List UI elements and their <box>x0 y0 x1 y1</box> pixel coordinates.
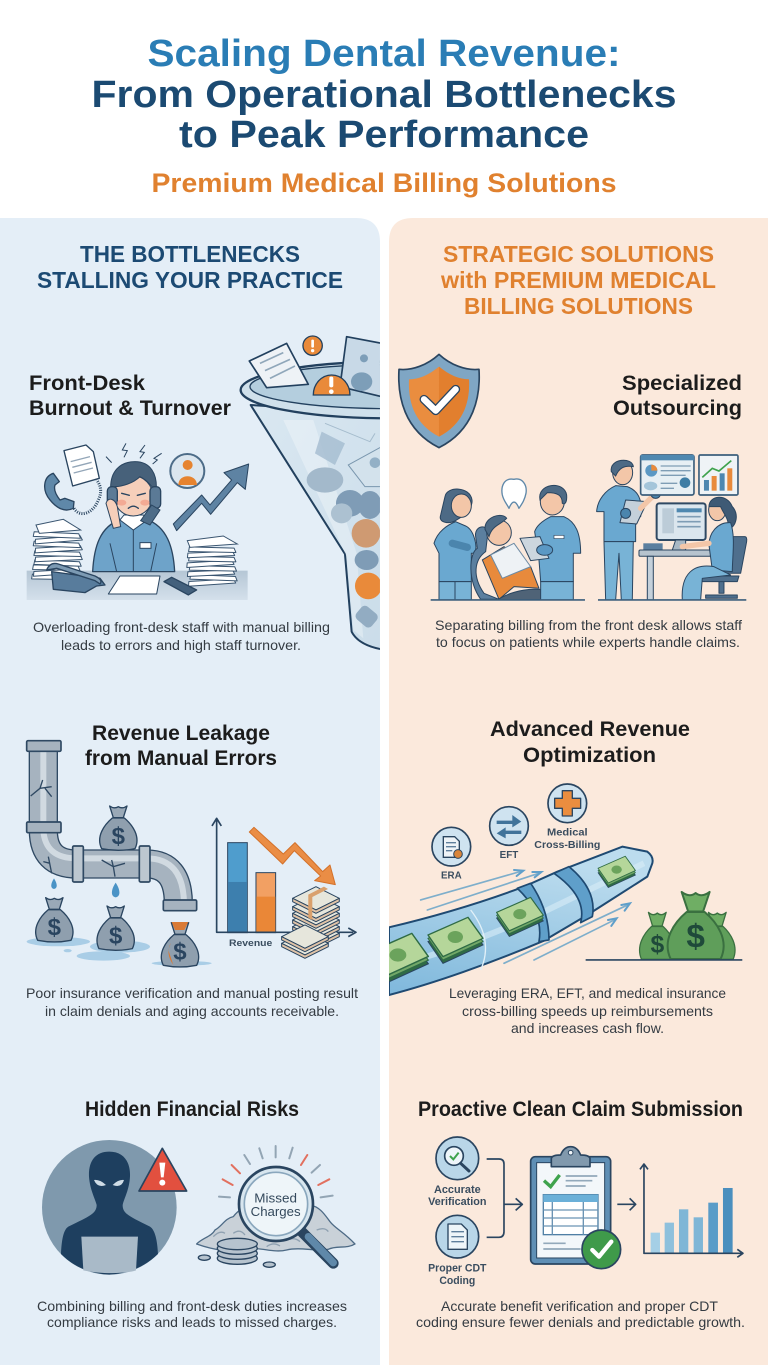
section title: revenue leakage: Revenue Leakage <box>92 721 270 745</box>
caption: outsourcing: Separating billing from the front desk allows staff <box>435 617 742 633</box>
illustration: outsourcing <box>399 354 747 600</box>
section title: specialized outsourcing <box>613 371 742 420</box>
section title: revenue leakage: from Manual Errors <box>85 746 277 770</box>
icon: cash pipeline <box>368 847 653 995</box>
illustration: clean claims flow <box>428 1137 743 1287</box>
subtitle: Premium Medical Billing Solutions <box>152 168 616 198</box>
icon: medical cross-billing: Cross-Billing <box>534 840 600 851</box>
caption: hidden risks: compliance risks and leads to missed charges. <box>47 1314 337 1330</box>
icon: EFT: EFT <box>500 850 519 861</box>
title: From Operational Bottlenecks <box>92 74 676 116</box>
illustration: funnel <box>240 335 380 650</box>
section title: front-desk burnout <box>29 371 232 420</box>
speed arrows <box>421 870 630 963</box>
section title: revenue optimization: Optimization <box>523 743 656 767</box>
icon: worried woman <box>93 443 175 572</box>
icon: green money bags: $ <box>686 918 705 955</box>
caption: revenue optimization <box>449 985 726 1036</box>
section title: revenue optimization: Advanced Revenue <box>490 717 690 741</box>
caption: revenue optimization: and increases cash flow. <box>511 1020 664 1036</box>
icon: pile with magnifying glass: Missed <box>254 1191 297 1205</box>
section title: clean claim submission: Proactive Clean Claim Submission <box>418 1097 743 1121</box>
puddles <box>27 937 212 966</box>
caption: outsourcing: to focus on patients while experts handle claims. <box>436 634 740 650</box>
icon: document <box>64 445 99 486</box>
section title: front-desk burnout: Burnout & Turnover <box>29 396 232 420</box>
icon: person target <box>170 454 204 488</box>
icon: dashboard screen <box>641 455 694 495</box>
icon: accurate verification: Accurate <box>434 1184 481 1196</box>
icon: accurate verification: Verification <box>428 1196 486 1208</box>
caption: revenue leakage <box>26 985 358 1019</box>
figure: assistant <box>434 489 476 600</box>
figure: dentist with clipboard <box>520 485 581 600</box>
icon: ERA <box>432 827 471 882</box>
icon: desk phone <box>47 563 105 593</box>
arrow: falling revenue <box>249 827 335 885</box>
arrow: inputs to clipboard <box>487 1159 522 1237</box>
section title: specialized outsourcing: Outsourcing <box>613 396 742 420</box>
icon: leaking pipe <box>27 741 197 911</box>
icon: warning triangle <box>139 1148 187 1191</box>
icon: ERA: ERA <box>441 871 462 882</box>
icon: computer desk <box>639 503 711 600</box>
caption: revenue optimization: cross-billing speeds up reimbursements <box>462 1003 713 1019</box>
heading: strategic solutions: BILLING SOLUTIONS <box>464 293 693 319</box>
bar chart: revenue <box>212 818 356 948</box>
icon: pile with magnifying glass: Charges <box>251 1205 301 1219</box>
title <box>92 33 676 156</box>
heading: bottlenecks: THE BOTTLENECKS <box>80 241 300 267</box>
caption: front-desk burnout: leads to errors and high staff turnover. <box>61 637 301 653</box>
caption: clean claims <box>416 1298 745 1330</box>
section title: revenue leakage <box>85 721 277 770</box>
icon: tooth <box>502 479 526 508</box>
icon: accurate verification <box>428 1137 486 1208</box>
panel: the bottlenecks <box>0 218 380 1365</box>
figure: billing expert seated <box>682 497 747 600</box>
icon: green money bags <box>586 892 742 960</box>
icon: telephone handset <box>45 473 101 514</box>
caption: revenue leakage: in claim denials and aging accounts receivable. <box>45 1003 339 1019</box>
icon: anonymous figure <box>42 1140 177 1275</box>
heading: strategic solutions <box>440 241 716 319</box>
icon: EFT <box>490 807 528 861</box>
heading: strategic solutions: with PREMIUM MEDICAL <box>440 267 716 293</box>
icon: money bags: $ <box>109 922 122 949</box>
section title: revenue optimization <box>490 717 690 767</box>
icon: green money bags: $ <box>650 932 664 959</box>
illustration: stressed front-desk worker <box>27 443 249 600</box>
caption: hidden risks: Combining billing and front-desk duties increases <box>37 1298 347 1314</box>
illustration: revenue optimization <box>368 784 742 995</box>
icon: right paper stack <box>187 536 237 586</box>
title: to Peak Performance <box>179 114 589 156</box>
icon: money bags: $ <box>112 823 125 850</box>
icon: money stacks <box>282 887 339 958</box>
floor lines <box>431 597 746 602</box>
icon: shield with check <box>399 354 479 448</box>
section title: specialized outsourcing: Specialized <box>622 371 742 395</box>
figure: billing expert standing <box>597 460 661 600</box>
caption: revenue leakage: Poor insurance verification and manual posting result <box>26 985 358 1001</box>
icon: medical cross-billing <box>534 784 600 851</box>
heading: bottlenecks: STALLING YOUR PRACTICE <box>37 267 343 293</box>
icon: claim clipboard <box>531 1147 621 1269</box>
figure: patient in chair <box>471 515 568 600</box>
icon: paper on desk <box>108 576 160 594</box>
icon: smartphone <box>164 577 197 595</box>
section title: hidden financial risks: Hidden Financial Risks <box>85 1097 299 1121</box>
caption: clean claims: coding ensure fewer denials and predictable growth. <box>416 1314 745 1330</box>
caption: outsourcing <box>435 617 742 650</box>
caption: front-desk burnout <box>33 619 330 653</box>
caption: revenue optimization: Leveraging ERA, EFT, and medical insurance <box>449 985 726 1001</box>
arrow: clipboard to chart <box>617 1198 636 1210</box>
heading: strategic solutions: STRATEGIC SOLUTIONS <box>443 241 714 267</box>
bar chart: revenue: Revenue <box>229 938 272 948</box>
heading: bottlenecks <box>37 241 343 293</box>
icon: money bags: $ <box>173 938 187 965</box>
section title: front-desk burnout: Front-Desk <box>29 371 145 395</box>
caption: clean claims: Accurate benefit verification and proper CDT <box>441 1298 718 1314</box>
icon: proper CDT coding: Proper CDT <box>428 1262 487 1274</box>
arrow: rising turnover <box>173 464 249 531</box>
icon: money bags: $ <box>48 914 61 941</box>
icon: money bags <box>36 806 199 967</box>
icon: pile with magnifying glass <box>197 1146 355 1267</box>
caption: front-desk burnout: Overloading front-desk staff with manual billing <box>33 619 330 635</box>
icon: proper CDT coding <box>428 1215 487 1287</box>
title: Scaling Dental Revenue: <box>148 33 620 75</box>
icon: proper CDT coding: Coding <box>439 1275 475 1287</box>
icon: medical cross-billing: Medical <box>547 827 588 838</box>
icon: left paper stack <box>32 519 82 580</box>
panel: strategic solutions <box>368 218 768 1365</box>
bar chart: growth <box>640 1164 743 1257</box>
illustration: leaking pipe and revenue chart <box>27 741 356 967</box>
icon: growth chart screen <box>699 455 738 495</box>
illustration: hidden risks <box>42 1140 355 1275</box>
caption: hidden risks <box>37 1298 347 1330</box>
